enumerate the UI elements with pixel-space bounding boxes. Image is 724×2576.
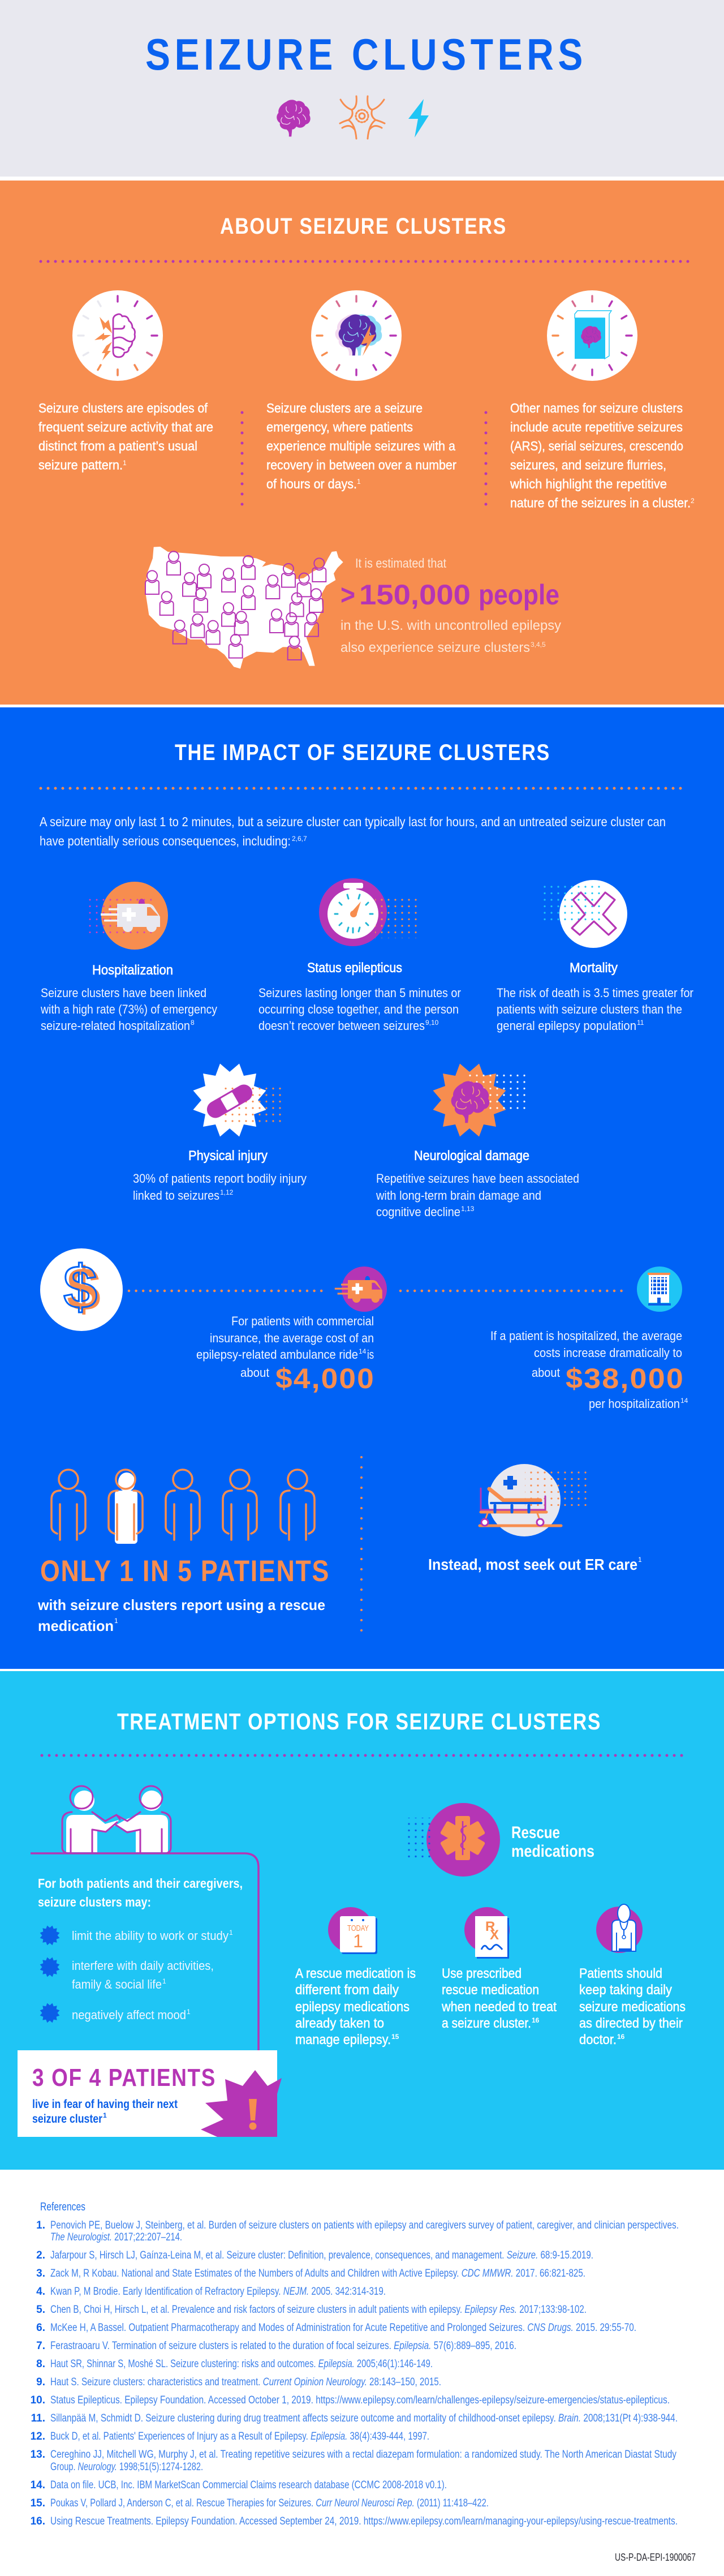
list: reference items: 10. xyxy=(31,2394,45,2406)
callout: only 1 in 5 patients: with seizure clusters report using a rescue xyxy=(37,1596,325,1613)
card: physical injury: Physical injury xyxy=(188,1148,268,1164)
card: hospitalization: 8 xyxy=(191,1019,195,1027)
card: neurological damage: 1,13 xyxy=(461,1205,475,1213)
text: emergency: Seizure clusters are a seizure xyxy=(266,401,423,415)
list: reference items: 3. xyxy=(36,2268,45,2279)
text: ER care: Instead, most seek out ER care xyxy=(428,1556,637,1573)
text: use prescribed medication xyxy=(441,1966,557,2031)
list: reference items: The Neurologist. 2017;22:207–214. xyxy=(50,2231,182,2243)
text: use prescribed medication: a seizure cluster. xyxy=(442,2016,531,2031)
callout: 3 of 4 patients: 3 OF 4 PATIENTS xyxy=(32,2064,216,2092)
list: reference items: McKee H, A Bassel. Outpatient Pharmacotherapy and Modes of Administration for Acute Repetitive and Prolonged Seizures. CNS Drugs. 2015. 29:55-70. xyxy=(50,2322,636,2334)
card: mortality: general epilepsy population xyxy=(497,1019,636,1033)
list: reference items: 14. xyxy=(31,2479,45,2491)
card: mortality: patients with seizure clusters than the xyxy=(497,1002,682,1016)
text: use prescribed medication: when needed to treat xyxy=(441,1999,557,2015)
bullet: work or study: 1 xyxy=(229,1929,233,1937)
card: neurological damage xyxy=(376,1148,579,1219)
callout: 150,000 people: It is estimated that xyxy=(355,556,447,570)
text: definition xyxy=(38,401,213,472)
text: different from daily medications xyxy=(295,1966,416,2047)
text: other names xyxy=(510,401,695,510)
icon: prescription xyxy=(464,1907,510,1959)
text: intro: have potentially serious consequences, including: xyxy=(40,834,291,848)
heading: about: ABOUT SEIZURE CLUSTERS xyxy=(220,214,507,239)
icon: hospital building xyxy=(637,1266,682,1312)
card: physical injury xyxy=(133,1148,307,1203)
text: other names: include acute repetitive seizures xyxy=(510,420,683,435)
card: physical injury: 30% of patients report bodily injury xyxy=(133,1171,307,1186)
card: neurological damage: with long-term brain damage and xyxy=(376,1188,541,1203)
bullet: daily activities: 1 xyxy=(162,1977,166,1985)
icon: ER stretcher xyxy=(480,1464,588,1536)
text: emergency: of hours or days. xyxy=(266,476,357,491)
bullet: daily activities xyxy=(40,1957,214,1991)
callout: 150,000 people: 3,4,5 xyxy=(531,641,546,649)
list: reference items: 6. xyxy=(36,2322,45,2334)
text: caregivers lead-in: For both patients and their caregivers, xyxy=(38,1876,243,1891)
text: hospitalization cost: costs increase dramatically to xyxy=(534,1346,682,1360)
text: ambulance cost: about xyxy=(240,1366,269,1380)
callout: 3 of 4 patients xyxy=(18,2050,282,2137)
text: ambulance cost: epilepsy-related ambulance ride xyxy=(196,1347,358,1362)
text: definition: seizure pattern. xyxy=(38,457,123,472)
text: use prescribed medication: 16 xyxy=(532,2016,540,2024)
list: reference items: Data on file. UCB, Inc. IBM MarketScan Commercial Claims research database (CCMC 2008-2018 v0.1). xyxy=(50,2479,447,2491)
card: mortality: The risk of death is 3.5 times greater for xyxy=(497,986,693,1000)
map: people across the U.S. xyxy=(145,547,343,669)
icon: brain emergency xyxy=(311,290,402,381)
document code: US-P-DA-EPI-1900067 xyxy=(615,2552,696,2563)
title: SEIZURE CLUSTERS xyxy=(145,29,587,79)
text: keep taking daily medications xyxy=(579,1966,686,2047)
callout: 3 of 4 patients: live in fear of having their next xyxy=(32,2098,178,2111)
card: hospitalization: with a high rate (73%) of emergency xyxy=(40,1002,217,1016)
heading: references: References xyxy=(40,2201,85,2213)
text: ambulance cost: $4,000 xyxy=(275,1363,375,1394)
callout: only 1 in 5 patients: medication xyxy=(38,1617,114,1634)
text: other names: 2 xyxy=(691,497,695,505)
list: reference items: 1. xyxy=(36,2219,45,2231)
card: neurological damage: Repetitive seizures have been associated xyxy=(376,1171,579,1186)
panel: impact of seizure clusters xyxy=(0,707,724,1669)
list: reference items: 12. xyxy=(31,2431,45,2442)
text: hospitalization cost xyxy=(490,1329,688,1411)
text: ambulance cost: 14 xyxy=(359,1347,367,1355)
callout: only 1 in 5 patients xyxy=(37,1555,330,1634)
list: reference items: Sillanpää M, Schmidt D. Seizure clustering during drug treatment affects seizure outcome and mortality of childhood-onset epilepsy. Brain. 2008;131(Pt 4):938-944. xyxy=(50,2412,678,2424)
text: definition: 1 xyxy=(123,459,127,467)
list: reference items: Chen B, Choi H, Hirsch L, et al. Prevalence and risk factors of seizure clusters in adult patients with epilepsy. Epilepsy Res. 2017;133:98-102. xyxy=(50,2304,587,2316)
text: definition: Seizure clusters are episodes of xyxy=(38,401,208,415)
text: hospitalization cost: If a patient is hospitalized, the average xyxy=(490,1329,682,1343)
icon: lightning bolt xyxy=(408,99,429,138)
list: reference items: 8. xyxy=(36,2358,45,2370)
icon: dollar sign: $ xyxy=(67,1255,101,1323)
card: hospitalization xyxy=(40,963,217,1033)
callout: only 1 in 5 patients: 1 xyxy=(114,1617,118,1625)
icon: star of life xyxy=(406,1803,500,1877)
text: hospitalization cost: about xyxy=(532,1366,560,1380)
text: definition: frequent seizure activity that are xyxy=(38,420,213,435)
text: caregivers lead-in: seizure clusters may: xyxy=(38,1895,151,1909)
list: reference items: Jafarpour S, Hirsch LJ, Gaínza-Leina M, et al. Seizure cluster: Definition, prevalence, consequences, and management. Seizure. 68:9-15.2019. xyxy=(50,2249,593,2261)
card: status epilepticus: 9,10 xyxy=(425,1019,439,1027)
text: ambulance cost: is xyxy=(367,1347,374,1362)
icon: calendar: TODAY xyxy=(347,1924,369,1933)
card: mortality: Mortality xyxy=(570,960,618,976)
list: reference items: 11. xyxy=(31,2412,45,2424)
card: hospitalization: Hospitalization xyxy=(92,963,173,978)
card: status epilepticus xyxy=(258,960,461,1033)
panel: treatment options xyxy=(0,1671,724,2170)
icon: calendar xyxy=(328,1907,377,1954)
list: reference items: 15. xyxy=(31,2497,45,2509)
text: intro xyxy=(40,814,666,848)
icon: five patients xyxy=(51,1470,314,1544)
icon: neuron xyxy=(340,96,385,139)
list: reference items: Haut S. Seizure clusters: characteristics and treatment. Current Opinion Neurology. 28:143–150, 2015. xyxy=(50,2376,441,2388)
icon: stopwatch xyxy=(319,878,419,946)
card: hospitalization: Seizure clusters have been linked xyxy=(41,986,206,1000)
text: keep taking daily medications: seizure medications xyxy=(579,1999,686,2015)
card: physical injury: linked to seizures xyxy=(133,1188,219,1203)
panel: references xyxy=(31,2201,696,2563)
text: other names: which highlight the repetitive xyxy=(510,476,667,491)
list: reference items: 16. xyxy=(31,2515,45,2527)
icon: doctor xyxy=(596,1904,643,1953)
bullet: mood xyxy=(40,2003,191,2023)
text: use prescribed medication: rescue medication xyxy=(442,1982,539,1998)
text: hospitalization cost: per hospitalization xyxy=(589,1397,680,1411)
text: different from daily medications: manage epilepsy. xyxy=(295,2032,391,2047)
icon: book with brain xyxy=(547,290,637,381)
icon: patient and caregiver handshake xyxy=(62,1786,171,1853)
bullet: work or study xyxy=(40,1926,233,1945)
heading: rescue medications xyxy=(511,1823,594,1861)
text: different from daily medications: epilepsy medications xyxy=(295,1999,410,2015)
callout: 3 of 4 patients: 1 xyxy=(103,2111,107,2119)
list: reference items: 4. xyxy=(36,2286,45,2298)
card: status epilepticus: Status epilepticus xyxy=(307,960,402,976)
card: status epilepticus: occurring close together, and the person xyxy=(258,1002,459,1016)
icon: alert burst xyxy=(201,2070,282,2137)
text: emergency: 1 xyxy=(357,478,361,486)
list: reference items xyxy=(31,2219,679,2527)
text: keep taking daily medications: as directed by their xyxy=(579,2016,683,2031)
card: status epilepticus: Seizures lasting longer than 5 minutes or xyxy=(258,986,461,1000)
card: status epilepticus: doesn’t recover between seizures xyxy=(258,1019,425,1033)
text: other names: (ARS), serial seizures, crescendo xyxy=(510,439,683,453)
card: neurological damage: Neurological damage xyxy=(414,1148,529,1164)
text: other names: seizures, and seizure flurries, xyxy=(510,457,666,472)
callout: 150,000 people xyxy=(341,556,561,655)
card: neurological damage: cognitive decline xyxy=(376,1205,460,1219)
text: different from daily medications: already taken to xyxy=(295,2016,384,2031)
panel: header xyxy=(0,0,724,177)
text: keep taking daily medications: Patients should xyxy=(579,1966,662,1981)
icon: ambulance xyxy=(88,882,168,950)
text: hospitalization cost: 14 xyxy=(680,1397,688,1405)
card: physical injury: 1,12 xyxy=(220,1188,234,1196)
callout: 150,000 people: > xyxy=(341,579,355,611)
icon: calendar: 1 xyxy=(353,1931,363,1951)
card: mortality xyxy=(497,960,693,1033)
list: reference items: 9. xyxy=(36,2376,45,2388)
list: reference items: Group. Neurology. 1998;51(5):1274-1282. xyxy=(50,2461,203,2473)
bullet: daily activities: interfere with daily activities, xyxy=(72,1959,214,1973)
icon: ambulance cost xyxy=(335,1266,387,1312)
list: reference items: 13. xyxy=(31,2449,45,2461)
list: reference items: Zack M, R Kobau. National and State Estimates of the Numbers of Adults and Children with Active Epilepsy. CDC MMWR. 2017. 66:821-825. xyxy=(50,2268,585,2279)
text: hospitalization cost: $38,000 xyxy=(566,1363,684,1394)
heading: rescue medications: medications xyxy=(511,1842,594,1861)
icon: mortality X xyxy=(541,880,627,948)
text: different from daily medications: A rescue medication is xyxy=(295,1966,416,1981)
text: different from daily medications: different from daily xyxy=(295,1982,399,1998)
icon: prescription: X xyxy=(490,1927,499,1943)
bullet: work or study: limit the ability to work or study xyxy=(72,1929,229,1943)
heading: rescue medications: Rescue xyxy=(511,1823,560,1842)
text: keep taking daily medications: 16 xyxy=(617,2033,625,2041)
callout: 150,000 people: people xyxy=(479,579,559,611)
text: different from daily medications: 15 xyxy=(391,2033,399,2041)
text: use prescribed medication: Use prescribed xyxy=(442,1966,522,1981)
icon: brain xyxy=(277,100,311,136)
list: reference items: Poukas V, Pollard J, Anderson C, et al. Rescue Therapies for Seizures. Curr Neurol Neurosci Rep. (2011) 11:418–422. xyxy=(50,2497,489,2509)
text: emergency: experience multiple seizures with a xyxy=(266,439,455,453)
callout: 3 of 4 patients: seizure cluster xyxy=(32,2113,102,2126)
icon: bandage xyxy=(193,1064,286,1136)
icon: brain with seizure bolts xyxy=(72,290,163,381)
card: hospitalization: seizure-related hospitalization xyxy=(41,1019,190,1033)
list: reference items: 2. xyxy=(36,2249,45,2261)
panel: about seizure clusters xyxy=(0,181,724,705)
text: caregivers lead-in xyxy=(38,1876,243,1909)
text: ambulance cost: For patients with commercial xyxy=(231,1314,374,1328)
text: emergency: emergency, where patients xyxy=(266,420,413,435)
list: reference items: Kwan P, M Brodie. Early Identification of Refractory Epilepsy. NEJM. 2005. 342:314-319. xyxy=(50,2286,386,2298)
bullet: mood: 1 xyxy=(187,2008,191,2016)
text: definition: distinct from a patient’s usual xyxy=(38,439,197,453)
text: emergency xyxy=(266,401,456,491)
icon: dollar sign xyxy=(40,1248,123,1331)
heading: treatment: TREATMENT OPTIONS FOR SEIZURE CLUSTERS xyxy=(117,1708,601,1734)
card: mortality: 11 xyxy=(637,1019,644,1027)
text: intro: 2,6,7 xyxy=(292,835,307,843)
bullet: mood: negatively affect mood xyxy=(72,2008,186,2022)
list: reference items: 7. xyxy=(36,2340,45,2352)
icon: dollar sign: $ xyxy=(63,1252,97,1321)
callout: 150,000 people: 150,000 xyxy=(359,579,471,611)
list: reference items: Ferastraoaru V. Termination of seizure clusters is related to the duration of focal seizures. Epilepsia. 57(6):889–895, 2016. xyxy=(50,2340,516,2352)
bullet: daily activities: family & social life xyxy=(72,1977,162,1991)
list: reference items: Haut SR, Shinnar S, Moshé SL. Seizure clustering: risks and outcomes. Epilepsia. 2005;46(1):146-149. xyxy=(50,2358,433,2370)
icon: damaged brain xyxy=(433,1064,528,1136)
text: keep taking daily medications: keep taking daily xyxy=(579,1982,672,1998)
callout: only 1 in 5 patients: ONLY 1 IN 5 PATIENTS xyxy=(40,1555,330,1588)
text: emergency: recovery in between over a number xyxy=(266,457,456,472)
list: effects xyxy=(40,1926,233,2023)
icon: prescription: R xyxy=(485,1919,495,1934)
callout: 150,000 people: also experience seizure clusters xyxy=(341,640,530,655)
text: keep taking daily medications: doctor. xyxy=(579,2032,617,2047)
text: other names: Other names for seizure clusters xyxy=(510,401,683,415)
text: ambulance cost: insurance, the average cost of an xyxy=(210,1331,374,1345)
text: ER care: 1 xyxy=(638,1556,642,1564)
text: ambulance cost xyxy=(196,1314,375,1394)
list: reference items: 5. xyxy=(36,2304,45,2316)
list: reference items: Buck D, et al. Patients' Experiences of Injury as a Result of Epilepsy. Epilepsia. 38(4):439-444, 1997. xyxy=(50,2431,429,2442)
callout: 150,000 people: in the U.S. with uncontrolled epilepsy xyxy=(341,618,561,633)
text: other names: nature of the seizures in a cluster. xyxy=(510,496,691,510)
heading: impact: THE IMPACT OF SEIZURE CLUSTERS xyxy=(175,740,550,765)
